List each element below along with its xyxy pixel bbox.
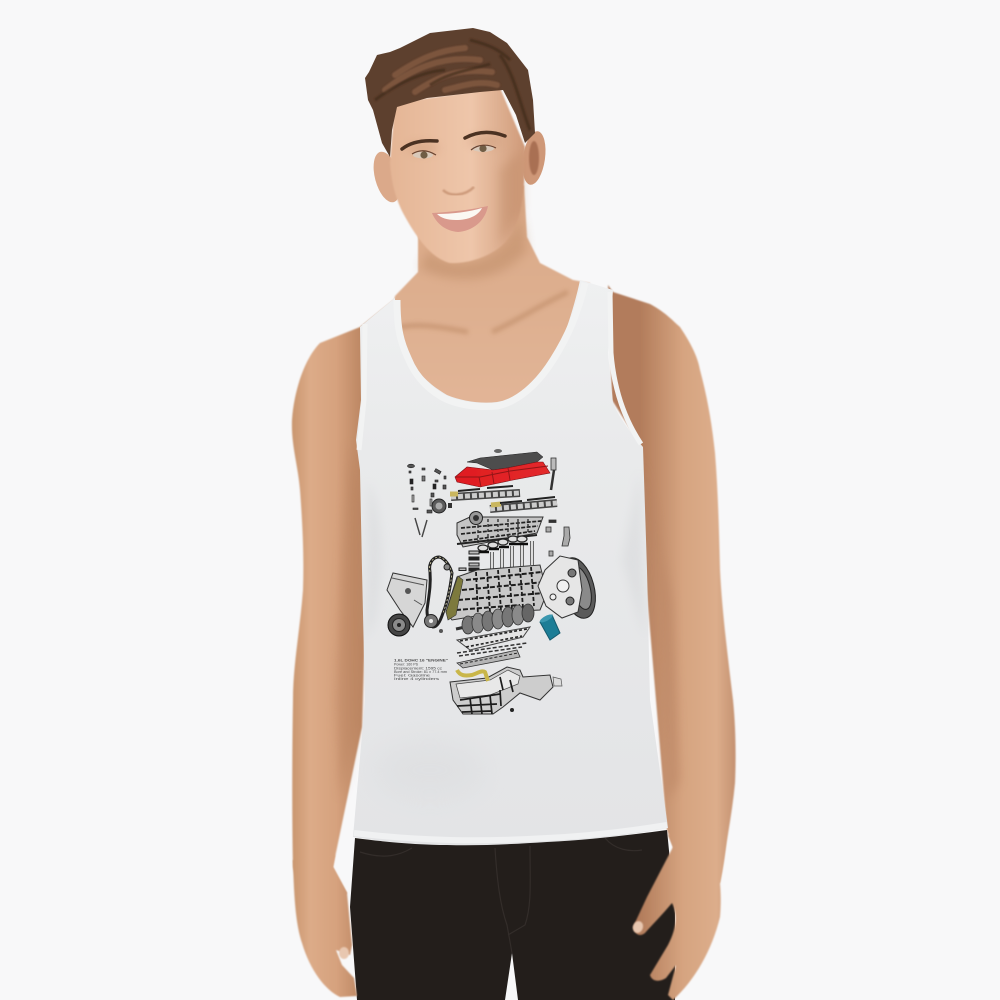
flywheel [538, 554, 601, 622]
spec text block: 1.6L DOHC 16 "ENGINE" [394, 658, 448, 662]
ignition coil [551, 458, 556, 490]
mouth [432, 206, 488, 232]
spec text block [394, 658, 448, 681]
spec text block: Power: 160 PS [394, 662, 418, 666]
left hand [293, 855, 357, 997]
valve cover red [455, 462, 550, 487]
oil pan [450, 667, 553, 714]
face shading [407, 136, 522, 245]
arm band [359, 292, 641, 450]
tensioner pulley [388, 614, 410, 636]
tensioner bolt [444, 564, 450, 570]
oil pan gasket [457, 643, 527, 656]
top cover [467, 452, 543, 470]
tank top [353, 280, 668, 845]
crankshaft [456, 604, 534, 634]
piston stack [459, 551, 479, 571]
head gasket [457, 535, 537, 544]
spec text block: Displacement: 1595 cc [394, 666, 443, 670]
ears [369, 130, 549, 205]
timing chain [427, 557, 452, 627]
right thumb nail [631, 920, 645, 934]
spec text block: Bore and Stroke: 81 x 77.4 mm [394, 670, 447, 674]
sternum shadow [479, 340, 485, 395]
crank bolt [439, 629, 443, 633]
timing cover [387, 573, 427, 627]
left thumb nail [339, 947, 349, 959]
head [365, 28, 549, 263]
spec text block: Fuel: Gasoline [394, 674, 430, 678]
valve train left [408, 464, 446, 537]
right hand [631, 825, 727, 1000]
fabric shadows [366, 470, 645, 640]
oil cap [494, 449, 502, 453]
nose [443, 187, 474, 195]
left arm [292, 298, 396, 900]
small bracket right [546, 520, 570, 556]
face [390, 88, 525, 263]
eyes [412, 145, 496, 159]
oil pan baffle [457, 650, 520, 668]
spec text block: Inline 4 cylinders [394, 677, 440, 681]
bearing caps [457, 627, 530, 650]
pistons [478, 536, 532, 570]
engine graphic: exploded view [387, 449, 601, 714]
neck and chest [385, 185, 590, 410]
crank sprocket [424, 614, 438, 628]
neck band [397, 283, 585, 407]
hem [354, 825, 667, 840]
oil filter [539, 613, 560, 640]
eyebrows [402, 132, 505, 149]
cam gear left [432, 499, 452, 513]
camshaft upper [450, 486, 520, 497]
yellow oil pipe [457, 670, 488, 681]
collarbone shadow [396, 292, 568, 332]
pan bracket [553, 677, 562, 686]
pants [350, 830, 675, 1000]
drain plug [510, 708, 514, 712]
right arm [608, 285, 736, 883]
engine block [446, 565, 547, 620]
hair [365, 28, 535, 157]
cylinder head [457, 512, 543, 547]
camshaft lower [490, 497, 557, 509]
